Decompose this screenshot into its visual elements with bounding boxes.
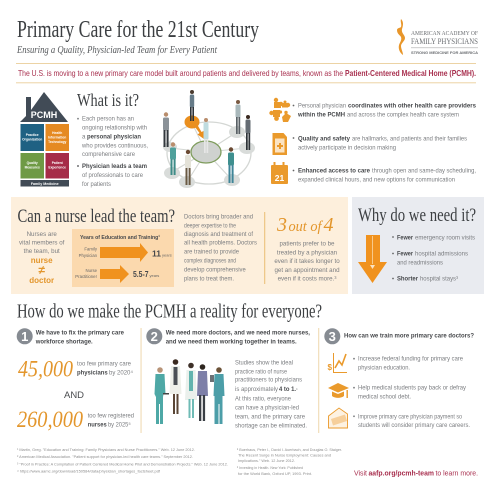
footnotes: left column — [17, 448, 228, 473]
icon: PCMH house: Family Medicine — [31, 182, 59, 186]
text block: doctors expertise: complex diagnoses and — [184, 257, 236, 264]
text block: doctors expertise: all health problems. Doctors — [184, 240, 257, 247]
text block: personal physician coordination: Personal physician — [298, 103, 347, 110]
chart: years of education and training: years — [150, 273, 159, 278]
text block: nurse not equal doctor: nurse — [31, 256, 53, 265]
text block: enhanced access: through open and same-day scheduling, — [372, 168, 476, 175]
text block: benefits: and readmissions — [397, 260, 443, 267]
badge 1: 1 — [21, 329, 28, 344]
icon: puzzle pieces — [269, 98, 291, 122]
icon: PCMH house — [20, 92, 69, 186]
icon: PCMH house: Health — [52, 131, 62, 135]
logo: American Academy of Family Physicians: FAMILY PHYSICIANS — [411, 36, 478, 46]
icon: PCMH house: Technology — [48, 140, 66, 144]
text block: quality and safety — [293, 135, 467, 151]
badge 3 — [324, 328, 340, 344]
text block: doctors expertise: develop comprehensive — [184, 267, 246, 274]
text block: doctors expertise: Doctors bring broader and — [184, 213, 254, 220]
text block: what is it bullets: personal physician — [87, 133, 141, 140]
illustration: care team network — [163, 90, 255, 188]
text block: quality and safety: actively participate in decision making — [298, 144, 397, 151]
callout: 3 out of 4 — [274, 214, 340, 283]
text block: what is it bullets: of professionals to care — [82, 172, 144, 179]
text block: medical debt: Help medical students pay back or defray — [358, 385, 467, 392]
icon: calendar 21 — [271, 162, 288, 184]
footnotes: left column: ³ "Proof in Practice: A Compilation of Patient Centered Medical Home Pilot and Demonstration Projects." Web. 12 June 2012. — [17, 463, 228, 467]
footnotes: right column: Implications." Web. 12 June 2012. — [238, 459, 295, 463]
logo: American Academy of Family Physicians: AMERICAN ACADEMY OF — [411, 30, 478, 37]
text block: ideal practice ratio: At this ratio, everyone — [235, 396, 292, 403]
text block: what is it bullets: comprehensive care — [82, 151, 136, 158]
step heading — [35, 329, 124, 345]
text block: nurse not equal doctor: ≠ — [38, 263, 45, 277]
call to action link: Visit — [354, 469, 368, 478]
callout: 3 out of 4: 4 — [324, 214, 334, 236]
illustration: five clinicians — [154, 359, 224, 424]
stat: 260,000 nurses: too few registered — [88, 413, 135, 420]
chart: years of education and training: Family — [84, 247, 98, 252]
call to action link — [354, 469, 478, 478]
step heading — [166, 329, 310, 345]
text block: ideal practice ratio: team, and the primary care — [235, 413, 306, 420]
text block: federal funding: Increase federal funding for primary care — [358, 356, 464, 363]
icon: clipboard document — [272, 133, 287, 155]
people — [163, 90, 250, 185]
text block: ideal practice ratio: Studies show the ideal — [235, 359, 293, 366]
text block: nurse not equal doctor — [19, 231, 65, 285]
step heading: We need more doctors, and we need more nurses, — [166, 329, 310, 336]
icon: PCMH house: PCMH — [31, 110, 57, 120]
text block: enhanced access: expanded clinical hours, and new options for communication — [298, 177, 456, 184]
text block: ideal practice ratio: 4 to 1. — [279, 386, 296, 393]
stat: 260,000 nurses: 260,000 — [17, 407, 83, 432]
stat: 260,000 nurses: by 2025⁵ — [108, 422, 131, 429]
footnotes: right column — [237, 448, 342, 476]
panel: can a nurse lead the team — [11, 197, 348, 294]
text block: federal funding — [353, 356, 464, 372]
text block: benefits: Shorter — [397, 276, 419, 283]
text block: what is it bullets: Physician leads a team — [82, 163, 147, 170]
text block: ideal practice ratio: can have a physician-led — [235, 404, 300, 411]
text block: ideal practice ratio: shortage can be eliminated. — [235, 422, 307, 429]
icon: PCMH house: Experience — [48, 166, 66, 170]
text block: ideal practice ratio: ⁶ — [296, 387, 298, 392]
text block: medical debt: medical school debt. — [358, 394, 411, 401]
text block: federal funding: physician education. — [358, 365, 410, 372]
text block: ideal practice ratio: practitioners to physicians — [235, 377, 302, 384]
text block: enhanced access: Enhanced access to care — [298, 168, 371, 175]
footnotes: left column: ² American Medical Association. "Patient support for physician-led health care teams." September 2012. — [17, 455, 193, 459]
chart: years of education and training: Years of Education and Training¹ — [80, 234, 160, 241]
stat: 45,000 physicians — [18, 357, 133, 382]
text block: personal physician coordination — [293, 103, 477, 119]
text block: doctors expertise: deeper expertise to the — [184, 222, 236, 229]
text block: benefits: hospital stays³ — [420, 276, 458, 283]
chart: years of education and training: Physician — [79, 253, 98, 258]
stat: 45,000 physicians: physicians — [77, 369, 108, 376]
text block: what is it bullets: who provides continuous, — [81, 143, 148, 150]
text block: quality and safety: Quality and safety — [298, 135, 351, 142]
panel: why do we need it — [352, 197, 484, 294]
icon: down arrow — [358, 235, 387, 283]
callout: 3 out of 4: even if it costs more.³ — [278, 276, 336, 283]
stat: 45,000 physicians: by 2020⁴ — [109, 369, 133, 376]
text block: medical debt — [353, 385, 467, 401]
text block: enhanced access — [293, 168, 476, 184]
text block: physician payment: Improve primary care physician payment so — [358, 413, 462, 420]
heading: Can a nurse lead the team? — [18, 206, 175, 227]
panel: step 2 more doctors and nurses — [146, 328, 310, 429]
text block: personal physician coordination: and across the complex health care system — [347, 112, 459, 119]
text block: benefits: emergency room visits — [415, 234, 475, 241]
text block: doctors expertise: diagnosis and treatment of — [184, 231, 253, 238]
text block: what is it bullets — [77, 116, 148, 188]
logo: American Academy of Family Physicians: STRONG MEDICINE FOR AMERICA — [411, 51, 478, 55]
badge 2 — [146, 328, 162, 344]
stat: 45,000 physicians: too few primary care — [77, 361, 132, 368]
text block: benefits: Fewer — [397, 234, 414, 241]
heading: What is it?: What is it? — [77, 90, 139, 110]
logo: American Academy of Family Physicians — [397, 19, 478, 55]
icon: graduation cap — [328, 383, 349, 398]
step heading: workforce shortage. — [35, 338, 93, 345]
callout: 3 out of 4: even if it takes longer to — [274, 258, 340, 265]
step heading: How can we train more primary care doctors? — [344, 332, 474, 339]
intro banner — [16, 63, 476, 83]
chart: years of education and training: Nurse — [86, 268, 98, 273]
panel: step 1 workforce shortage — [17, 328, 135, 432]
text block: nurse not equal doctor: the team, but — [24, 248, 60, 255]
icon: PCMH house: Patient — [52, 161, 64, 165]
footnotes: right column: for the World Bank, Oxford UP, 1993. Print. — [238, 472, 312, 476]
footnotes: right column: The Recent Surge in Nurse Employment: Causes and — [238, 454, 331, 458]
callout: 3 out of 4: out of — [288, 219, 323, 235]
text block: benefits: Fewer — [397, 251, 414, 258]
chart: years of education and training: 5.5-7 — [133, 270, 149, 279]
icon: funding chart: $ — [328, 363, 332, 372]
intro banner: The U.S. is moving to a new primary care model built around patients and delivered by teams, known as the — [18, 69, 343, 78]
footnotes: right column: ⁵ Buerhaus, Peter I., David I. Auerbach, and Douglas O. Staiger. — [237, 448, 342, 452]
stat: 260,000 nurses — [17, 407, 135, 432]
icon: PCMH house: Organization — [22, 138, 42, 142]
icon: pay envelope — [328, 408, 348, 428]
text block: what is it bullets: ongoing relationship with — [82, 124, 148, 131]
icon: PCMH house: Quality — [27, 161, 38, 165]
badge 2: 2 — [151, 329, 158, 344]
icon: PCMH house: Information — [48, 136, 66, 140]
title: Primary Care for the 21st Century — [17, 17, 259, 43]
footnotes: right column: ⁶ Investing in Health. New York: Published — [237, 466, 303, 470]
badge 3: 3 — [329, 329, 336, 344]
text block: doctors expertise — [184, 213, 257, 283]
text block: nurse not equal doctor: doctor — [29, 276, 54, 285]
text block: doctors expertise: plans to treat them. — [184, 276, 234, 283]
callout: 3 out of 4: patients prefer to be — [279, 241, 335, 248]
text block: what is it bullets: Each person has an — [82, 116, 135, 123]
text block: what is it bullets: for patients — [82, 181, 111, 188]
chart: years of education and training: 11 — [152, 248, 161, 258]
text block: what is it bullets: a — [82, 133, 86, 140]
text block: benefits — [392, 234, 475, 283]
icon: PCMH house: Practice — [26, 133, 39, 137]
text block: nurse not equal doctor: Nurses are — [27, 231, 57, 238]
text block: ideal practice ratio: is approximately — [235, 386, 279, 393]
subtitle: Ensuring a Quality, Physician-led Team for Every Patient — [16, 45, 218, 56]
text block: nurse not equal doctor: vital members of — [19, 240, 65, 246]
text block: personal physician coordination: coordinates with other health care providers — [348, 103, 477, 110]
icon: funding chart — [328, 353, 347, 372]
step heading: and we need them working together in teams. — [166, 338, 297, 345]
text block: quality and safety: are hallmarks, and patients and their families — [352, 135, 467, 142]
chart: years of education and training: years — [162, 252, 172, 258]
call to action link: to learn more. — [436, 469, 478, 478]
chart: years of education and training: Practitioner — [75, 274, 98, 279]
stat: 45,000 physicians: 45,000 — [18, 357, 73, 382]
text block: physician payment: students will consider primary care careers. — [358, 422, 470, 429]
footnotes: left column: ¹ Martin, Greg. "Education and Training: Family Physicians and Nurse Practitioners." Web. 12 June 2012. — [17, 448, 195, 452]
and: AND — [64, 390, 84, 401]
callout: 3 out of 4: treated by a physician — [277, 249, 338, 256]
text block: personal physician coordination: within the PCMH — [297, 112, 346, 119]
heading: how do we make the PCMH a reality: How do we make the PCMH a reality for everyone? — [17, 301, 322, 323]
chart: years of education and training — [72, 229, 174, 287]
callout: 3 out of 4: 3 — [276, 214, 287, 236]
text block: benefits: hospital admissions — [415, 251, 468, 258]
icon: calendar 21: 21 — [275, 173, 284, 183]
footnotes: left column: ⁴ https://www.aamc.org/download/150584/data/physician_shortages_factsheet.pdf — [17, 469, 161, 473]
callout: 3 out of 4: get an appointment and — [274, 267, 340, 274]
stat: 260,000 nurses: nurses — [88, 422, 107, 429]
text block: physician payment — [353, 413, 470, 429]
icon: PCMH house: Measures — [25, 166, 40, 170]
step heading: We have to fix the primary care — [36, 329, 124, 336]
panel: step 3 train more doctors — [324, 328, 474, 429]
text block: doctors expertise: are trained to provide — [184, 248, 240, 255]
call to action link: aafp.org/pcmh-team — [368, 469, 434, 478]
text block: ideal practice ratio — [235, 359, 307, 429]
text block: ideal practice ratio: practice ratio of nurse — [235, 368, 287, 375]
